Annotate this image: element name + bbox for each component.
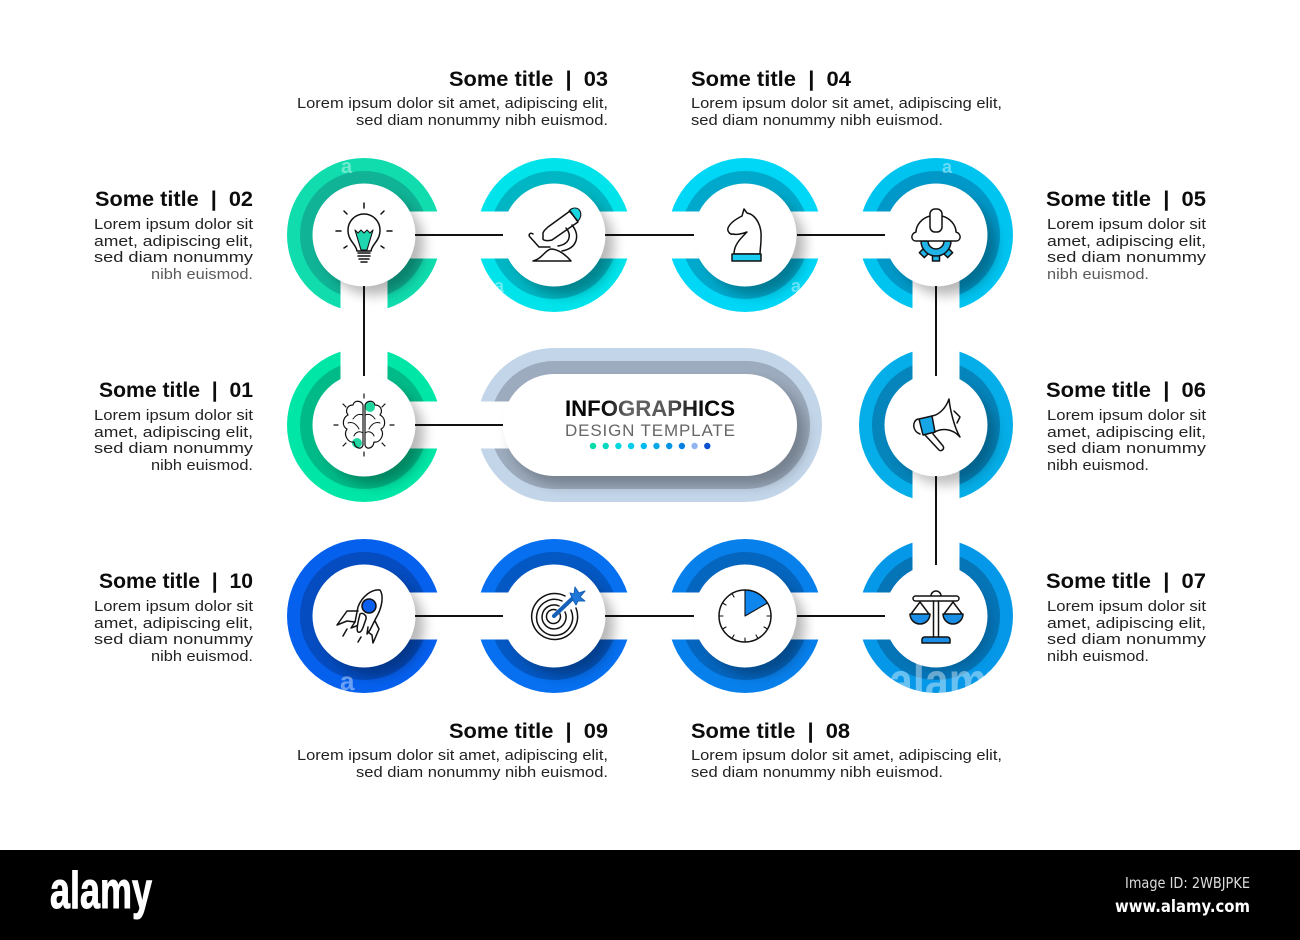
text block 02: Some title | 02 (95, 188, 253, 211)
text block 01: amet, adipiscing elit, (94, 424, 253, 441)
text block 01 (94, 379, 254, 474)
footer bar (0, 850, 1300, 940)
text block 01: sed diam nonummy (94, 440, 254, 457)
text block 02 (94, 188, 254, 283)
icon: light bulb (336, 203, 392, 262)
node 10: rocket (287, 539, 444, 693)
text block 01: Lorem ipsum dolor sit (94, 407, 254, 424)
text block 10: nibh euismod. (151, 648, 253, 665)
text block 05: sed diam nonummy (1047, 249, 1207, 266)
node 04: chess knight (665, 158, 825, 312)
text block 10 (94, 570, 254, 665)
footer image id: Image ID: 2WBJPKE (1125, 874, 1250, 892)
text block 04: sed diam nonummy nibh euismod. (691, 112, 943, 129)
text block 07: sed diam nonummy (1047, 631, 1207, 648)
text block 08: Lorem ipsum dolor sit amet, adipiscing elit, (691, 747, 1002, 764)
icon: chess knight (728, 209, 761, 261)
center dots (590, 443, 710, 449)
center heading: INFOGRAPHICS (565, 396, 735, 421)
connector lines (364, 235, 936, 616)
text block 03 (297, 68, 608, 129)
text block 10: amet, adipiscing elit, (94, 615, 253, 632)
text block 07: nibh euismod. (1047, 648, 1149, 665)
footer logo: alamy (50, 862, 152, 920)
text block 08 (691, 720, 1002, 781)
watermark marks (340, 156, 1011, 711)
text block 05: Some title | 05 (1046, 188, 1206, 211)
text block 02: nibh euismod. (151, 266, 253, 283)
text block 05: amet, adipiscing elit, (1047, 233, 1206, 250)
icon: rocket (337, 590, 382, 643)
node 01: brain (287, 345, 444, 502)
center subheading: DESIGN TEMPLATE (565, 421, 735, 440)
text block 02: Lorem ipsum dolor sit (94, 216, 254, 233)
text block 07 (1046, 570, 1207, 665)
text block 04: Some title | 04 (691, 68, 851, 91)
text block 05: nibh euismod. (1047, 266, 1149, 283)
text block 05 (1046, 188, 1207, 283)
text block 03: sed diam nonummy nibh euismod. (356, 112, 608, 129)
node 02: light bulb (287, 158, 444, 315)
footer url: www.alamy.com (1115, 897, 1250, 917)
text block 05: Lorem ipsum dolor sit (1047, 216, 1207, 233)
watermark marks: a (494, 276, 505, 296)
text block 09: sed diam nonummy nibh euismod. (356, 764, 608, 781)
text block 01: Some title | 01 (99, 379, 253, 402)
watermark marks: a (341, 156, 353, 178)
text block 09 (297, 720, 608, 781)
icon: helmet and gear (912, 209, 960, 261)
text block 07: Lorem ipsum dolor sit (1047, 598, 1207, 615)
text block 06 (1046, 379, 1207, 474)
text block 10: sed diam nonummy (94, 631, 254, 648)
text block 01: nibh euismod. (151, 457, 253, 474)
text block 06: Lorem ipsum dolor sit (1047, 407, 1207, 424)
text block 04 (691, 68, 1002, 129)
text block 03: Some title | 03 (449, 68, 608, 91)
text block 06: sed diam nonummy (1047, 440, 1207, 457)
node 03: microscope (474, 158, 634, 312)
text block 06: Some title | 06 (1046, 379, 1206, 402)
node 09: target (474, 539, 634, 693)
node 07: balance scale (856, 536, 1013, 693)
text block 07: Some title | 07 (1046, 570, 1206, 593)
text block 02: sed diam nonummy (94, 249, 254, 266)
text block 06: amet, adipiscing elit, (1047, 424, 1206, 441)
node 06: megaphone (859, 345, 1013, 505)
icon: brain (334, 394, 394, 456)
icon: balance scale (910, 591, 963, 643)
text block 04: Lorem ipsum dolor sit amet, adipiscing elit, (691, 95, 1002, 112)
icon: target with arrow (532, 587, 585, 640)
icon: clock (719, 590, 771, 642)
node 05: helmet and gear (856, 158, 1013, 315)
text block 10: Some title | 10 (99, 570, 253, 593)
text block 02: amet, adipiscing elit, (94, 233, 253, 250)
watermark marks: a (791, 276, 802, 296)
icon: microscope (529, 208, 581, 261)
text block 10: Lorem ipsum dolor sit (94, 598, 254, 615)
text block 06: nibh euismod. (1047, 457, 1149, 474)
watermark marks: a (340, 666, 355, 696)
text block 08: Some title | 08 (691, 720, 850, 743)
watermark marks: alamy (889, 653, 1011, 711)
text block 09: Lorem ipsum dolor sit amet, adipiscing elit, (297, 747, 608, 764)
text block 09: Some title | 09 (449, 720, 608, 743)
text block 07: amet, adipiscing elit, (1047, 615, 1206, 632)
central panel: infographics design template (470, 348, 822, 502)
watermark marks: a (942, 157, 953, 177)
node 08: clock (665, 539, 825, 693)
text block 03: Lorem ipsum dolor sit amet, adipiscing elit, (297, 95, 608, 112)
icon: megaphone (914, 399, 960, 451)
text block 08: sed diam nonummy nibh euismod. (691, 764, 943, 781)
